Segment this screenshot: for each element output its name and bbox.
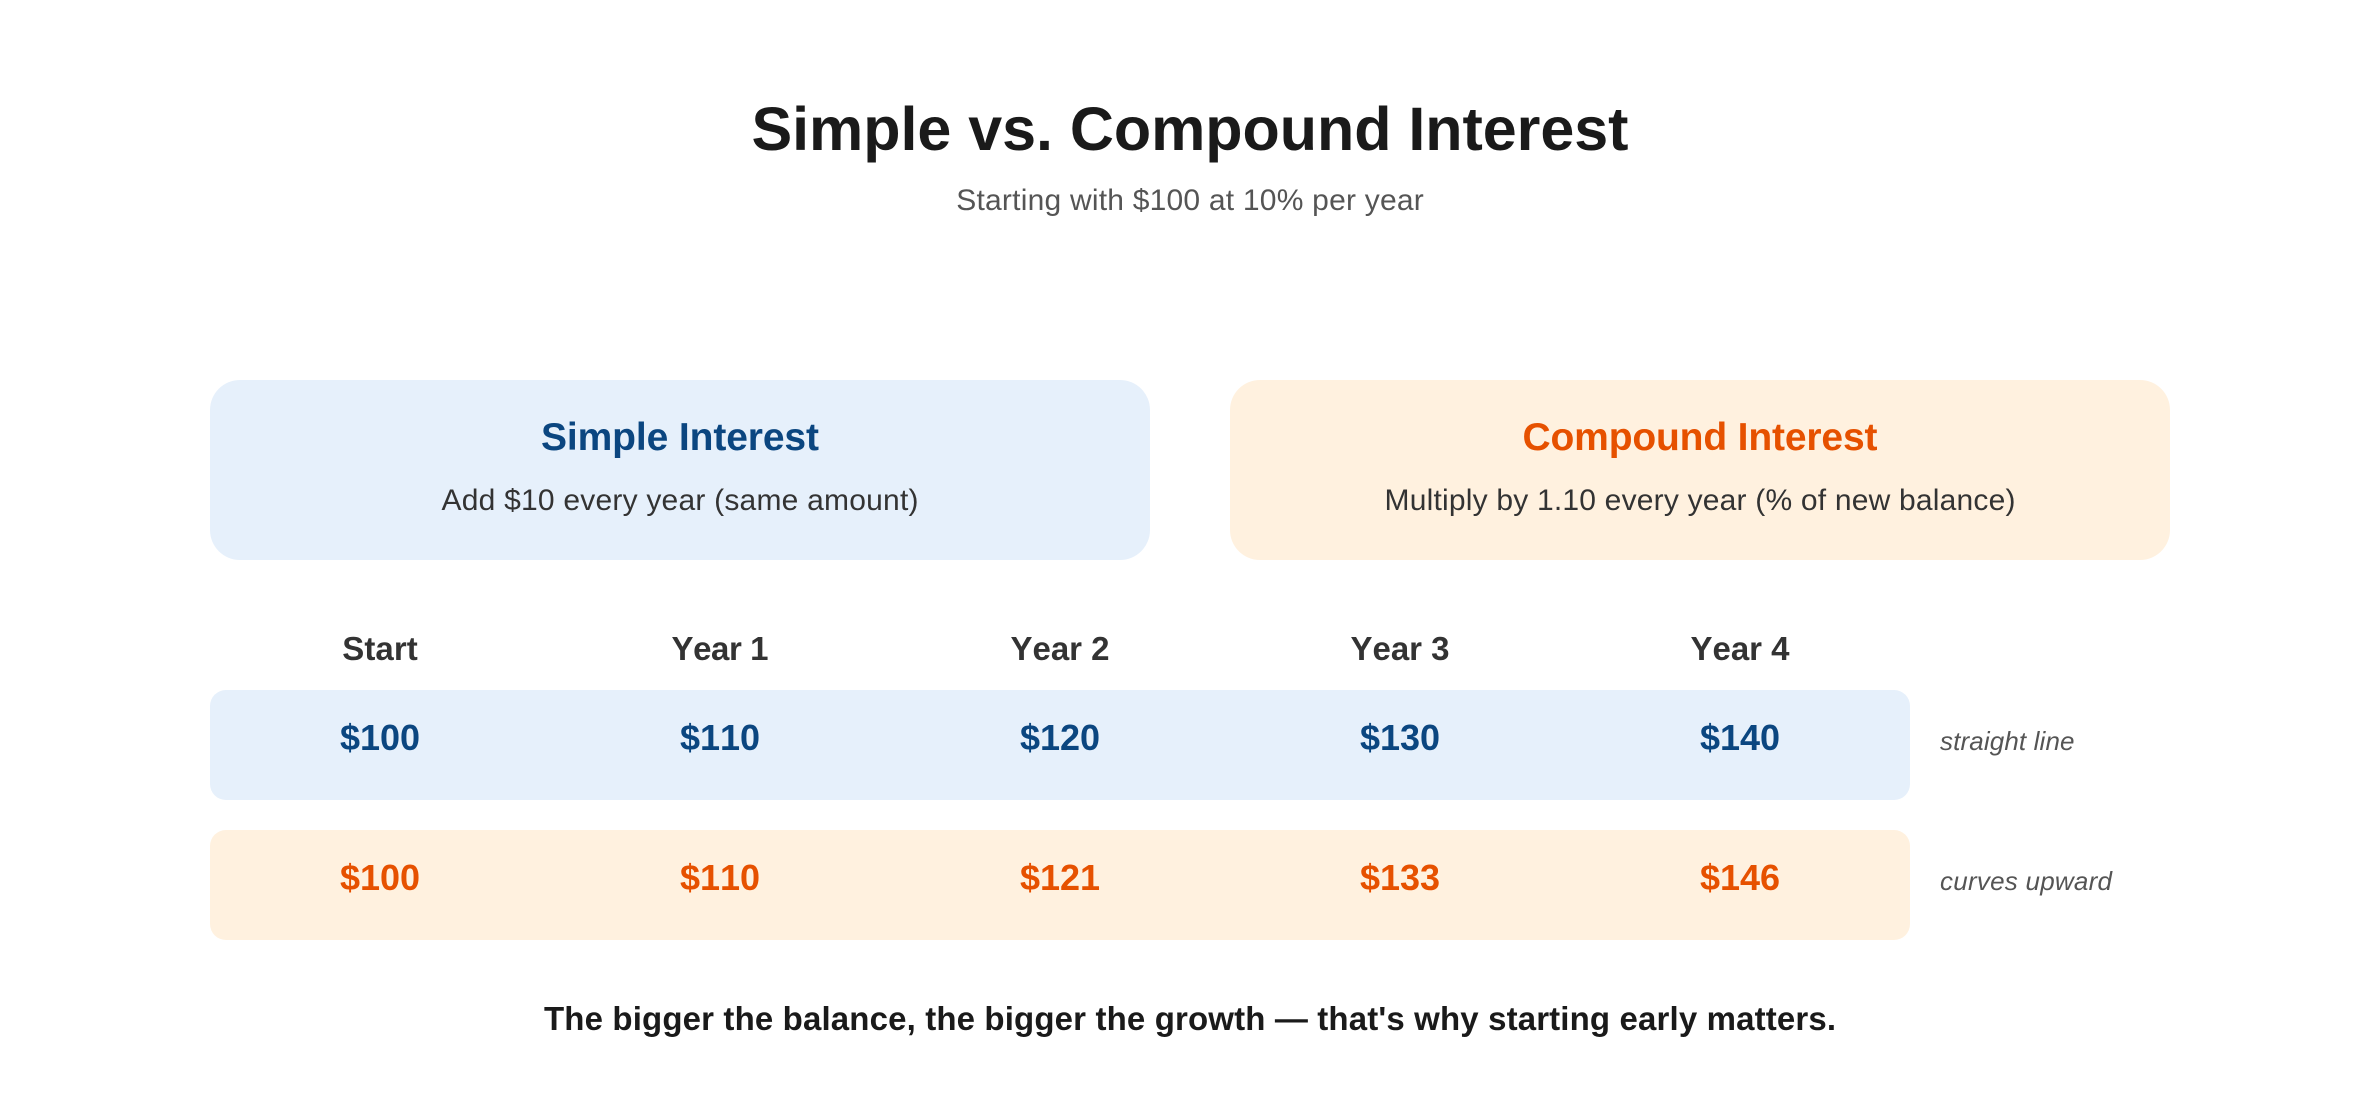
panel: compound interest	[1230, 380, 2170, 560]
table column headers	[342, 630, 1790, 667]
panel: simple interest	[210, 380, 1150, 560]
panel text: simple interest rule: Add $10 every year (same amount)	[442, 484, 918, 517]
row note: straight line: straight line	[1940, 726, 2074, 756]
row: compound interest values: $121	[1020, 857, 1100, 898]
row: simple interest values: $140	[1700, 717, 1780, 758]
table column headers: Year 4	[1690, 630, 1790, 667]
title: Simple vs. Compound Interest	[752, 95, 1628, 163]
panel heading: simple interest: Simple Interest	[541, 416, 819, 459]
row: compound interest values: $133	[1360, 857, 1440, 898]
row: simple interest values: $130	[1360, 717, 1440, 758]
row: simple interest values	[210, 690, 1910, 800]
panel heading: compound interest: Compound Interest	[1522, 416, 1878, 459]
row: simple interest values: $110	[680, 717, 760, 758]
row: compound interest values: $146	[1700, 857, 1780, 898]
row note: curves upward: curves upward	[1940, 866, 2114, 896]
row: simple interest values: $100	[340, 717, 420, 758]
row: compound interest values: $110	[680, 857, 760, 898]
takeaway: The bigger the balance, the bigger the growth — that's why starting early matters.	[544, 1000, 1836, 1037]
row: compound interest values: $100	[340, 857, 420, 898]
table column headers: Year 3	[1350, 630, 1450, 667]
panel text: compound interest rule: Multiply by 1.10 every year (% of new balance)	[1384, 484, 2016, 517]
subtitle: Starting with $100 at 10% per year	[956, 184, 1424, 217]
row: simple interest values: $120	[1020, 717, 1100, 758]
table column headers: Start	[342, 630, 418, 667]
table column headers: Year 1	[672, 630, 768, 667]
table column headers: Year 2	[1010, 630, 1110, 667]
row: compound interest values	[210, 830, 1910, 940]
